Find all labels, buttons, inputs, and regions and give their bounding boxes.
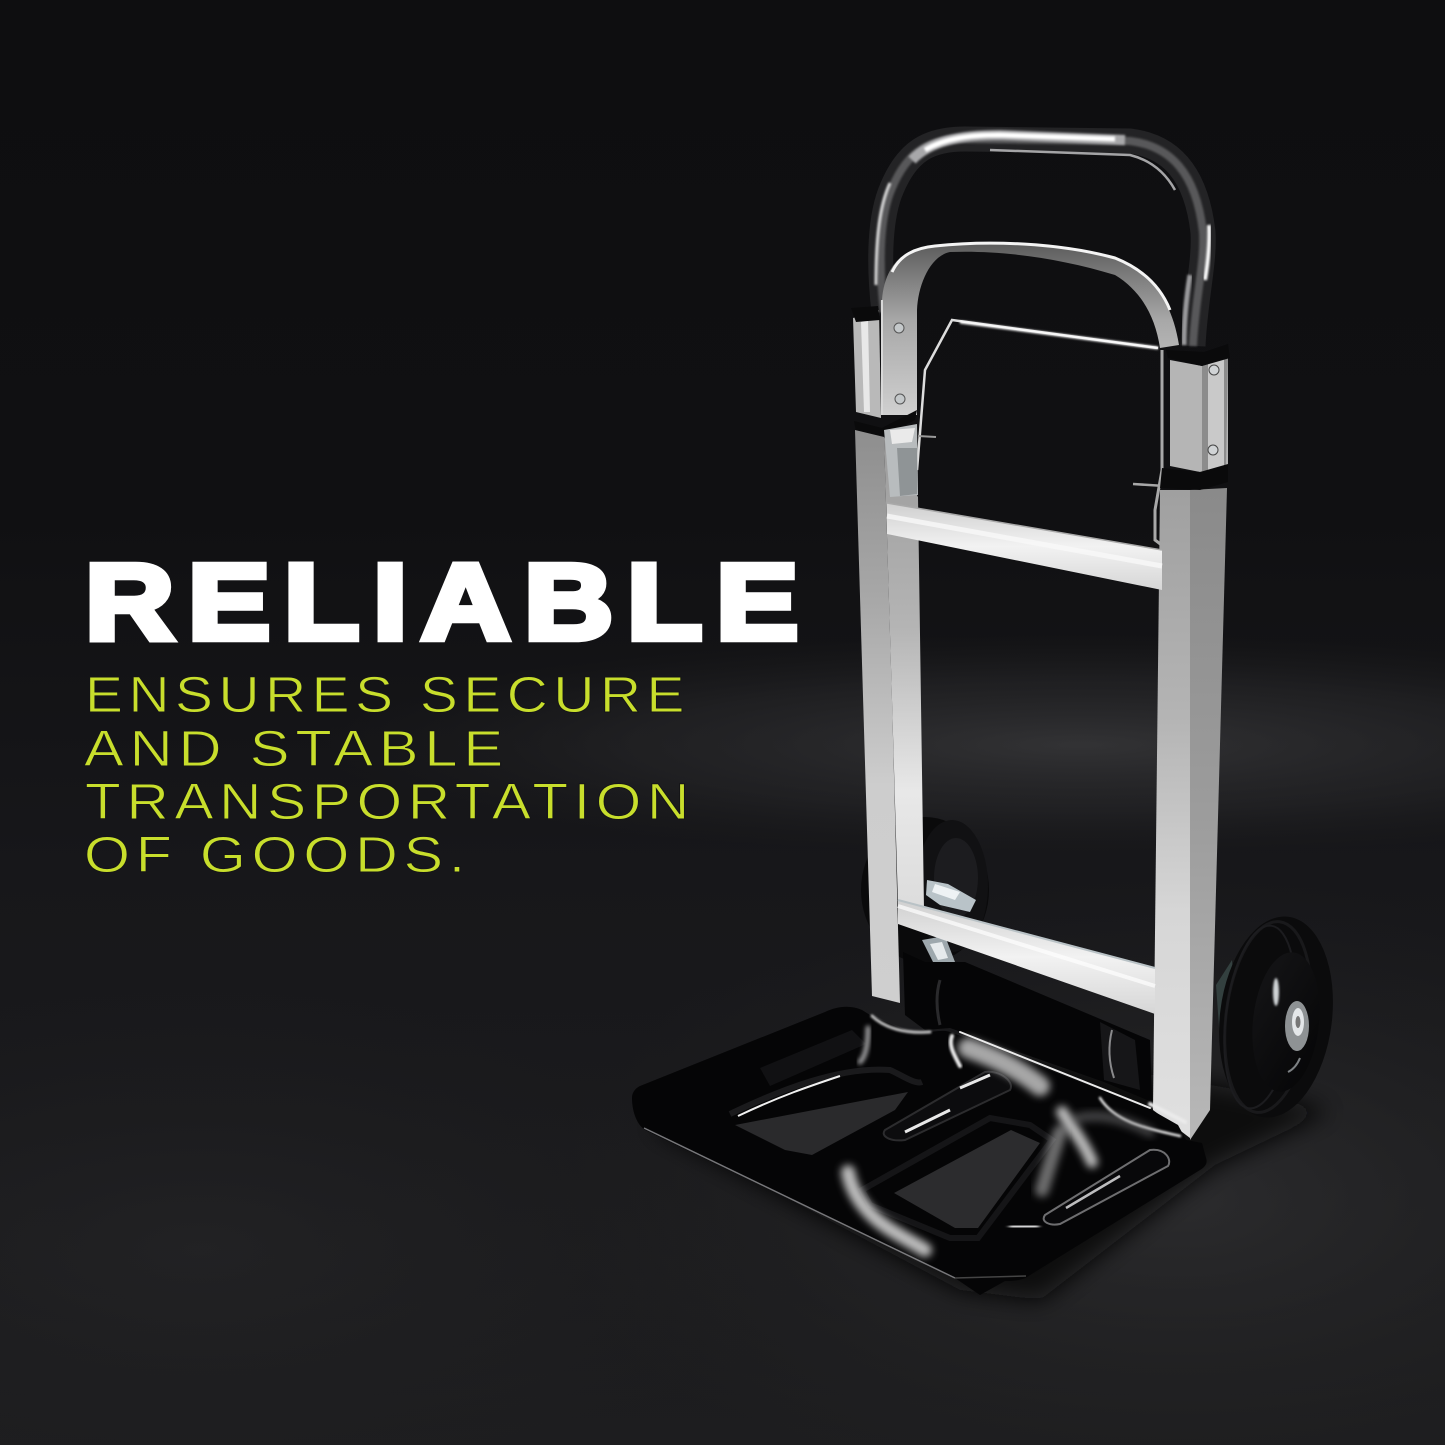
line 2: AND STABLE bbox=[84, 720, 509, 777]
plate glossy reflections bbox=[848, 1016, 1185, 1250]
line 4: OF GOODS. bbox=[84, 826, 471, 883]
left main rail bbox=[855, 424, 924, 1003]
plate opening: left bbox=[730, 1070, 922, 1155]
plate opening: right bbox=[862, 1118, 1052, 1238]
black base plate bbox=[632, 1007, 1207, 1295]
back support plate bbox=[903, 952, 1152, 1102]
upper cross bar bbox=[887, 503, 1162, 590]
folding inner handle plate bbox=[882, 243, 1179, 415]
floor shadow under the hand truck bbox=[650, 1040, 1330, 1300]
heading: RELIABLE: RELIABLE bbox=[85, 541, 812, 662]
chrome handle bbox=[876, 135, 1209, 346]
axle and rear hub bolts bbox=[922, 880, 976, 966]
wire latch bbox=[917, 320, 1165, 546]
line 3: TRANSPORTATION bbox=[85, 773, 695, 830]
subheading text block bbox=[84, 666, 695, 883]
right main rail bbox=[1153, 488, 1227, 1140]
plate pressed slots bbox=[884, 1072, 1169, 1225]
left upper rail section and collars bbox=[851, 306, 917, 436]
right wheel bbox=[1208, 910, 1344, 1124]
right upper rail section and collars bbox=[1160, 344, 1230, 490]
product: folding hand truck bbox=[632, 135, 1344, 1300]
lower cross bar bbox=[898, 900, 1155, 1014]
rear wheel bbox=[861, 817, 989, 963]
line 1: ENSURES SECURE bbox=[85, 666, 690, 723]
